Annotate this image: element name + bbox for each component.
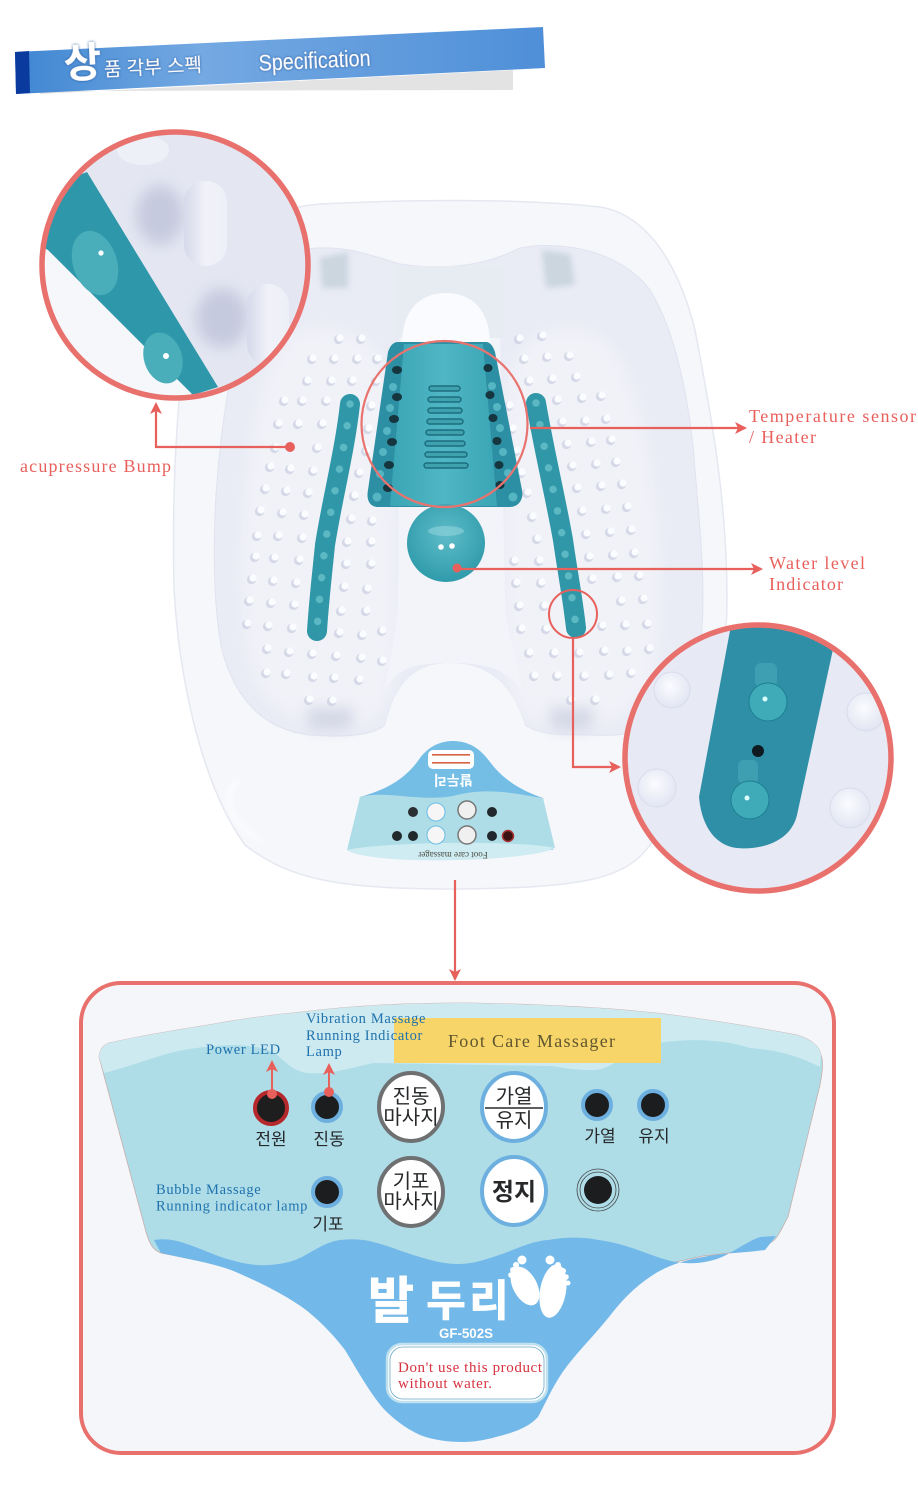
foot massager basin	[173, 201, 727, 889]
housing screws	[383, 364, 504, 492]
right footwell bumps	[504, 331, 654, 705]
label: Vibration Massage: Vibration Massage	[306, 1011, 426, 1027]
magnifier: acupressure bumps	[30, 132, 308, 410]
mini warning box	[428, 750, 474, 769]
central ridge	[385, 330, 522, 690]
label: Bubble Massage: Running indicator lamp	[156, 1198, 308, 1214]
left footwell bumps	[242, 334, 387, 706]
bead stems	[738, 663, 777, 784]
left teal strip	[317, 404, 350, 631]
yellow title bar: Foot Care Massager	[448, 1031, 615, 1051]
left footbed	[241, 328, 397, 728]
right teal strip	[536, 403, 576, 628]
label: temperature sensor	[749, 406, 916, 447]
housing vent slots	[424, 386, 468, 468]
mini panel caption: Foot care massager	[418, 850, 488, 860]
label: Bubble Massage: Bubble Massage	[156, 1182, 261, 1198]
LED: heat	[583, 1091, 616, 1146]
rear translucent block	[394, 266, 504, 338]
teal drop bumps	[72, 231, 118, 295]
central dome	[402, 293, 490, 345]
icon: footprints	[505, 1256, 570, 1320]
front rim crease	[229, 780, 260, 840]
water level ball	[407, 504, 485, 582]
LED: keep warm: 유지	[638, 1127, 670, 1146]
panel lower blue logo area	[154, 1236, 776, 1442]
right footbed	[505, 328, 661, 728]
rear wall colour patches	[320, 250, 575, 288]
header banner	[15, 27, 545, 94]
logo: brand name: 두	[426, 1278, 466, 1326]
warning box	[387, 1344, 547, 1402]
teal heater housing	[367, 342, 522, 507]
front rim bulge	[385, 663, 525, 751]
button: heat keep warm: 유지	[496, 1109, 532, 1132]
callout: strip tip circle	[549, 590, 597, 638]
label: water level indicator: Water level	[769, 553, 865, 573]
arrow: strip tip to magnifier	[573, 638, 619, 767]
button: stop: 정지	[492, 1179, 536, 1206]
warning box: without water.	[398, 1376, 492, 1392]
button: heat keep warm: 가열	[496, 1085, 532, 1108]
heading: Korean title	[63, 34, 203, 87]
heading: Korean title: 품 각부 스펙	[103, 54, 202, 81]
model number: GF-502S	[439, 1325, 493, 1341]
arrow: temperature sensor	[530, 427, 745, 429]
label: water level indicator: Indicator	[769, 574, 843, 594]
panel top wave	[99, 1003, 821, 1073]
arrow: basin to panel	[454, 880, 456, 979]
mini logo: 발두리	[434, 772, 472, 788]
warning box: Don't use this product	[398, 1360, 543, 1376]
LED: bubble: 기포	[312, 1215, 344, 1234]
label: water level indicator	[769, 553, 865, 594]
button: heat keep warm	[482, 1073, 546, 1141]
callout: heater circle	[362, 341, 528, 507]
label: temperature sensor: Temperature sensor	[749, 406, 916, 426]
button: stop	[482, 1157, 546, 1225]
LED: vibration: 진동	[313, 1130, 345, 1149]
button: bubble massage	[379, 1158, 443, 1226]
label: Vibration Massage: Lamp	[306, 1044, 342, 1060]
mini control panel on basin	[347, 741, 555, 860]
white massage nubs	[638, 672, 885, 828]
logo: brand name: 리	[469, 1278, 509, 1326]
logo: brand name	[368, 1273, 509, 1329]
LED: vibration	[313, 1093, 345, 1149]
panel: control panel detail	[81, 983, 834, 1453]
LED: heat: 가열	[584, 1127, 616, 1146]
magnifier: strip tip	[625, 620, 891, 891]
arrow: vibration lamp	[324, 1065, 334, 1097]
button: vibration massage	[379, 1073, 443, 1141]
label: acupressure Bump: acupressure Bump	[20, 456, 171, 476]
button: bubble massage: 마사지	[383, 1190, 439, 1213]
button: vibration massage: 마사지	[383, 1106, 439, 1129]
yellow title bar	[394, 1018, 661, 1063]
arrow: water level	[452, 564, 761, 572]
bottom well smudges	[305, 708, 595, 730]
button: vibration massage: 진동	[393, 1085, 429, 1108]
sensor hole	[577, 1169, 619, 1211]
basin inner tub	[214, 245, 703, 736]
heading: Korean title: 상	[63, 39, 102, 87]
arrow: acupressure bump	[156, 404, 295, 452]
LED: power	[255, 1092, 287, 1149]
panel base light blue	[99, 1003, 823, 1295]
LED: bubble	[312, 1178, 344, 1234]
LED: keep warm	[638, 1091, 670, 1146]
label: Vibration Massage: Running Indicator	[306, 1028, 423, 1044]
label: temperature sensor: / Heater	[749, 427, 816, 447]
LED: power: 전원	[255, 1130, 287, 1149]
heading: Specification: Specification	[258, 45, 371, 76]
label: Power LED: Power LED	[206, 1042, 281, 1058]
logo: brand name: 발	[368, 1273, 414, 1329]
button: bubble massage: 기포	[393, 1170, 429, 1193]
housing beads	[372, 382, 518, 502]
teal beads	[731, 683, 787, 819]
mini buttons	[392, 801, 514, 844]
arrow: power LED	[267, 1062, 277, 1099]
basin outer shell	[173, 201, 727, 889]
